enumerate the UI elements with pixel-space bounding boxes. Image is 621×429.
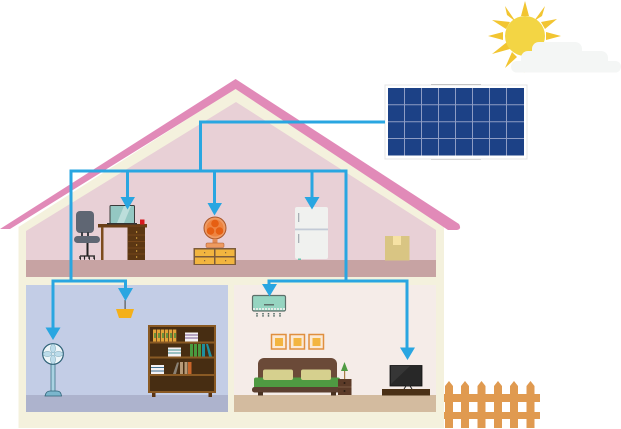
icon: standing fan <box>43 344 63 396</box>
icon: cloud <box>511 42 621 72</box>
icon: fridge <box>295 207 328 260</box>
left room wall <box>26 285 228 395</box>
house <box>0 79 460 428</box>
icon: laptop <box>107 206 137 224</box>
arrow: to television <box>400 348 415 360</box>
arrow: to fridge <box>304 197 320 210</box>
icon: ceiling lamp <box>116 300 134 318</box>
icon: air conditioner <box>252 296 286 317</box>
fence <box>444 381 540 428</box>
roof <box>0 79 460 230</box>
arrow: to lamp <box>118 288 133 301</box>
attic floor <box>26 260 436 277</box>
icon: dresser <box>194 248 236 265</box>
icon: desk <box>98 224 147 260</box>
icon: sun <box>488 1 561 73</box>
arrow: to laptop <box>120 197 135 210</box>
house walls <box>18 88 444 428</box>
icon: cardboard box <box>385 236 410 260</box>
left room floor <box>26 395 228 412</box>
icon: television <box>382 366 430 396</box>
right room wall <box>234 285 436 395</box>
books <box>151 330 212 374</box>
icon: red mug <box>140 220 144 224</box>
icon: nightstand with lamp <box>338 362 352 395</box>
wall pictures <box>272 334 324 349</box>
arrow: to air conditioner <box>262 284 277 296</box>
icon: bed <box>252 358 340 396</box>
wiring lines <box>53 122 407 348</box>
right room floor <box>234 395 436 412</box>
icon: table fan <box>204 217 226 248</box>
icon: bookshelf <box>148 325 216 397</box>
attic room <box>26 102 436 260</box>
icon: office chair <box>74 211 100 259</box>
arrow: to table fan <box>208 203 222 216</box>
arrow: to standing fan <box>46 328 60 340</box>
solar panel <box>385 84 527 160</box>
